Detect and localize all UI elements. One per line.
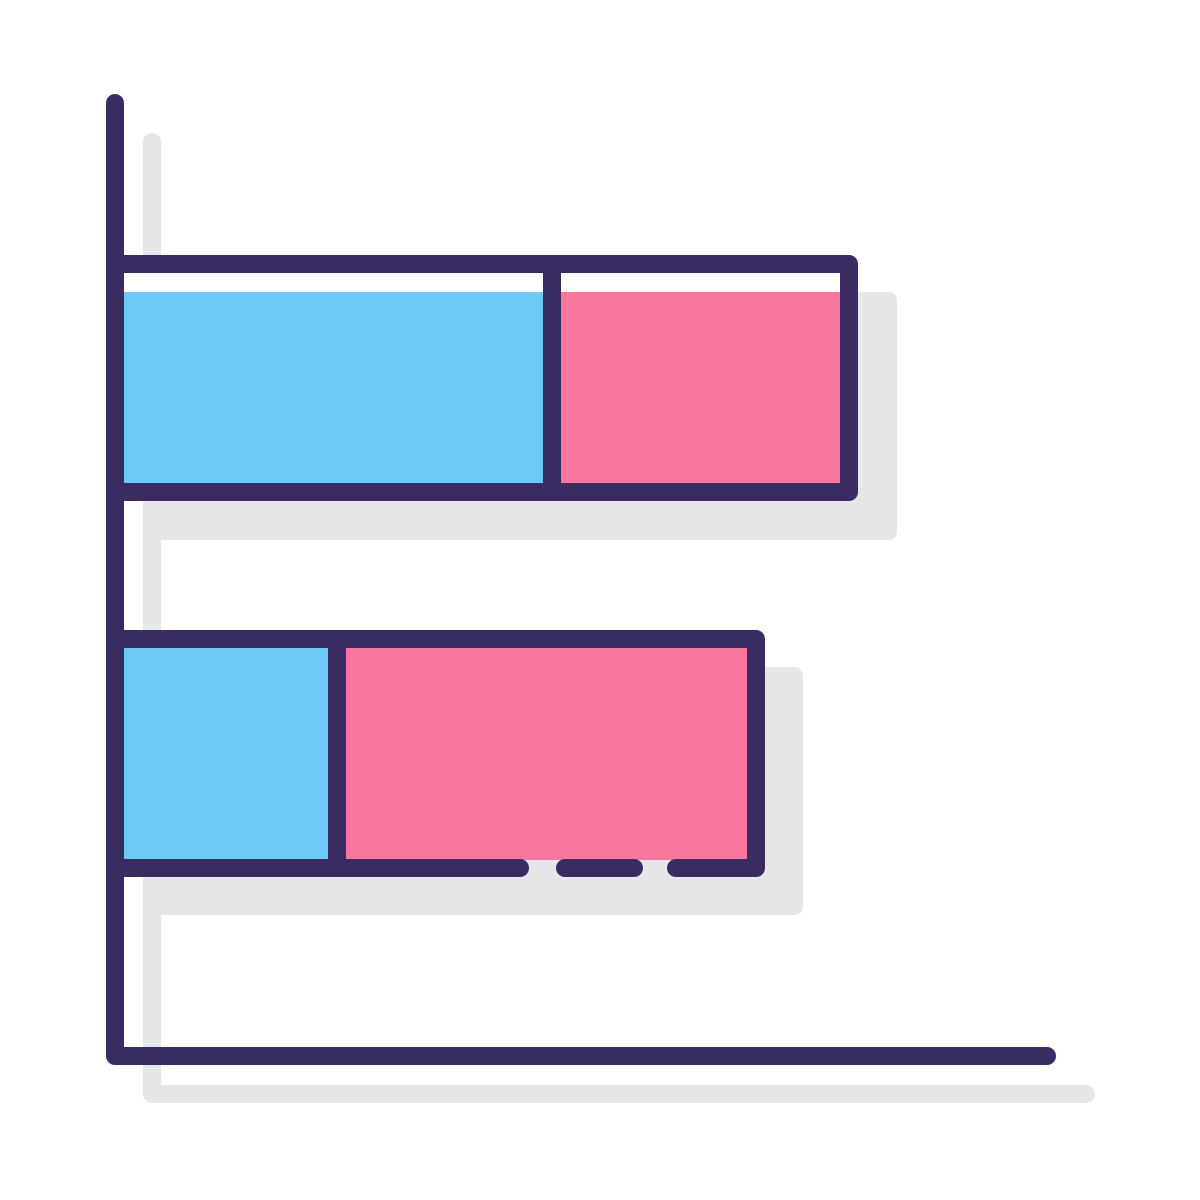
shadow: axes bbox=[152, 142, 1086, 1094]
shadow: bottom bar bbox=[143, 667, 803, 915]
shadow: top bar bbox=[143, 292, 897, 540]
axes bbox=[115, 103, 1047, 1056]
bottom bar bbox=[115, 639, 756, 868]
top bar bbox=[115, 264, 849, 492]
